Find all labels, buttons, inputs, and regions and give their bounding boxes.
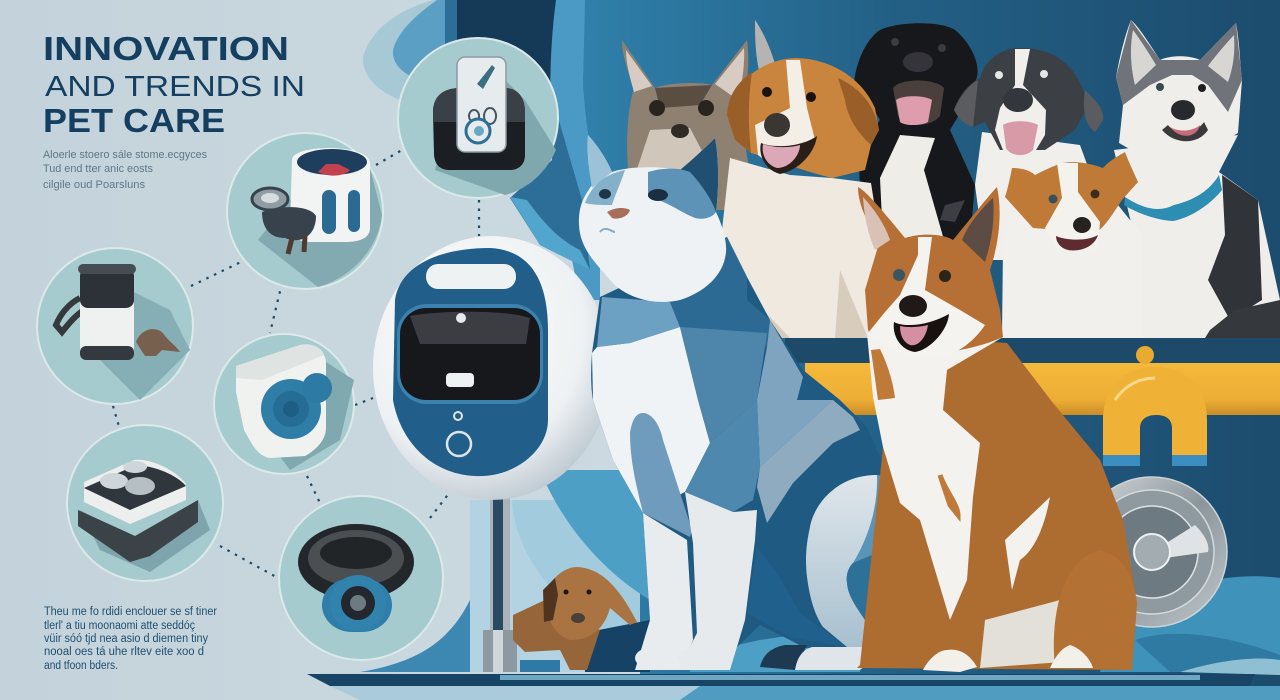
title: PET CARE [43,102,225,139]
body text: nooal oes tá uhe rltev eite xoo d [44,646,204,658]
body text: tlerl' a tiu moonaomi atte seddóç [44,620,195,632]
small brown dachshund [513,567,637,670]
brown and white dog [722,58,880,338]
dotted connectors [113,150,479,578]
subtitle text: Aloerle stoero sále stome.ecgyces [43,149,207,161]
body text: Theu me fo rdidi enclouer se sf tiner [44,606,217,618]
subtitle text [43,149,207,191]
back-row fluffy tail [755,20,777,75]
small brown and white dog [1002,152,1142,338]
large brown and white dog [857,187,1137,672]
smart robot device [373,236,611,500]
title: INNOVATION [43,30,289,67]
circle: lens device [279,496,443,660]
platform [307,674,1255,686]
circle: dispenser [398,38,558,198]
body text: vüir sóó tjd nea asio d diemen tiny [44,633,208,645]
grey and white dog [954,48,1103,260]
title [43,30,305,139]
stand pole [483,498,517,672]
circle: twin bowl [67,425,223,581]
yellow pipe [805,346,1280,466]
circle: feeder [227,133,383,289]
navy shelf [785,338,1280,363]
metal dial [1077,477,1227,627]
circle: bowl device [214,334,354,474]
subtitle text: Tud end tter anic eosts [43,163,153,175]
circle: travel mug [37,248,193,404]
body text [44,606,217,672]
black dog [854,23,978,240]
title: AND TRENDS IN [45,71,305,103]
subtitle text: cilgile oud Poarsluns [43,179,146,191]
tabby cat [622,40,750,210]
blue and white cat statue [579,135,905,670]
body text: and tfoon bders. [44,660,118,672]
husky with blue collar [1114,20,1280,338]
